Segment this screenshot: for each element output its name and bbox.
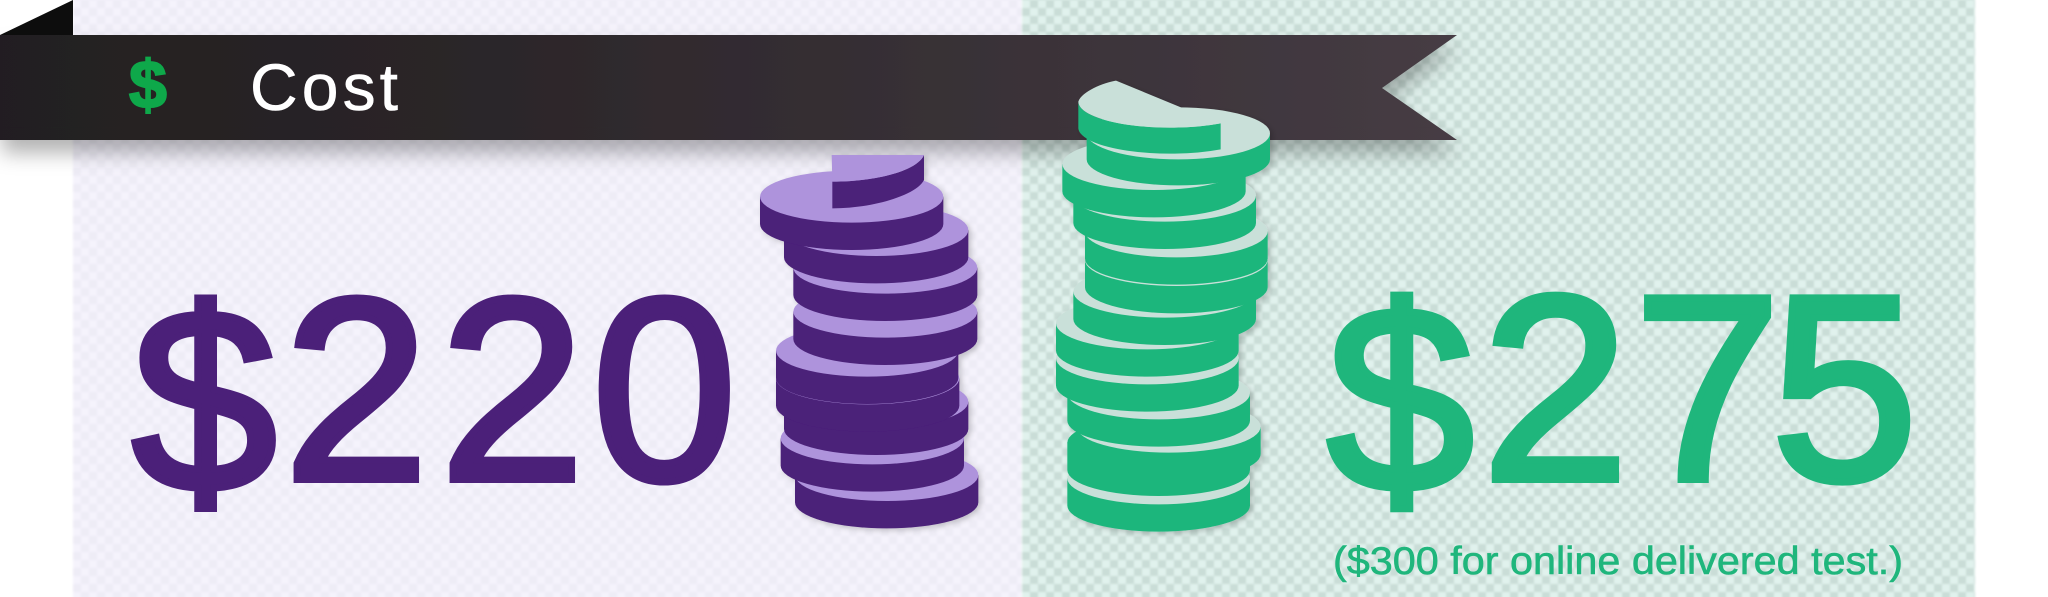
icon: green dollar sign: $ [129,47,167,123]
coin 9 [795,449,978,528]
icon: green coin stack [1056,81,1270,532]
ribbon fold [0,0,73,35]
coin 3 [793,242,977,321]
panel: left purple background [73,0,1022,597]
coin 7 [784,376,968,455]
coin 6 [776,352,959,432]
price: $220: $220 [132,246,737,546]
coin 2 [784,204,968,283]
coin 1 [1087,107,1270,185]
coin 9 [1067,367,1250,447]
coin 5 [776,325,958,404]
coin 1 [760,171,943,250]
coin 12 [1067,452,1250,532]
price: $275: $275 [1327,240,1918,546]
coin 7 [1056,297,1239,377]
icon: purple coin stack [760,155,978,528]
coin 5 [1085,234,1268,313]
coin 11 [1067,417,1250,496]
coin 3 [1073,170,1256,249]
broken coin on top [1078,81,1221,154]
ribbon banner [0,35,1457,140]
note: online test price: ($300 for online delivered test.) [1333,540,1903,583]
coin 2 [1062,138,1246,217]
coin 4 [793,286,977,365]
heading: Cost: Cost [250,50,398,124]
coin 8 [781,412,964,492]
coin 4 [1085,205,1268,285]
panel: right green background [1022,0,1975,597]
coin 10 [1077,401,1261,480]
coin 8 [1056,332,1239,412]
coin 6 [1073,266,1256,345]
broken coin on top [832,155,924,208]
